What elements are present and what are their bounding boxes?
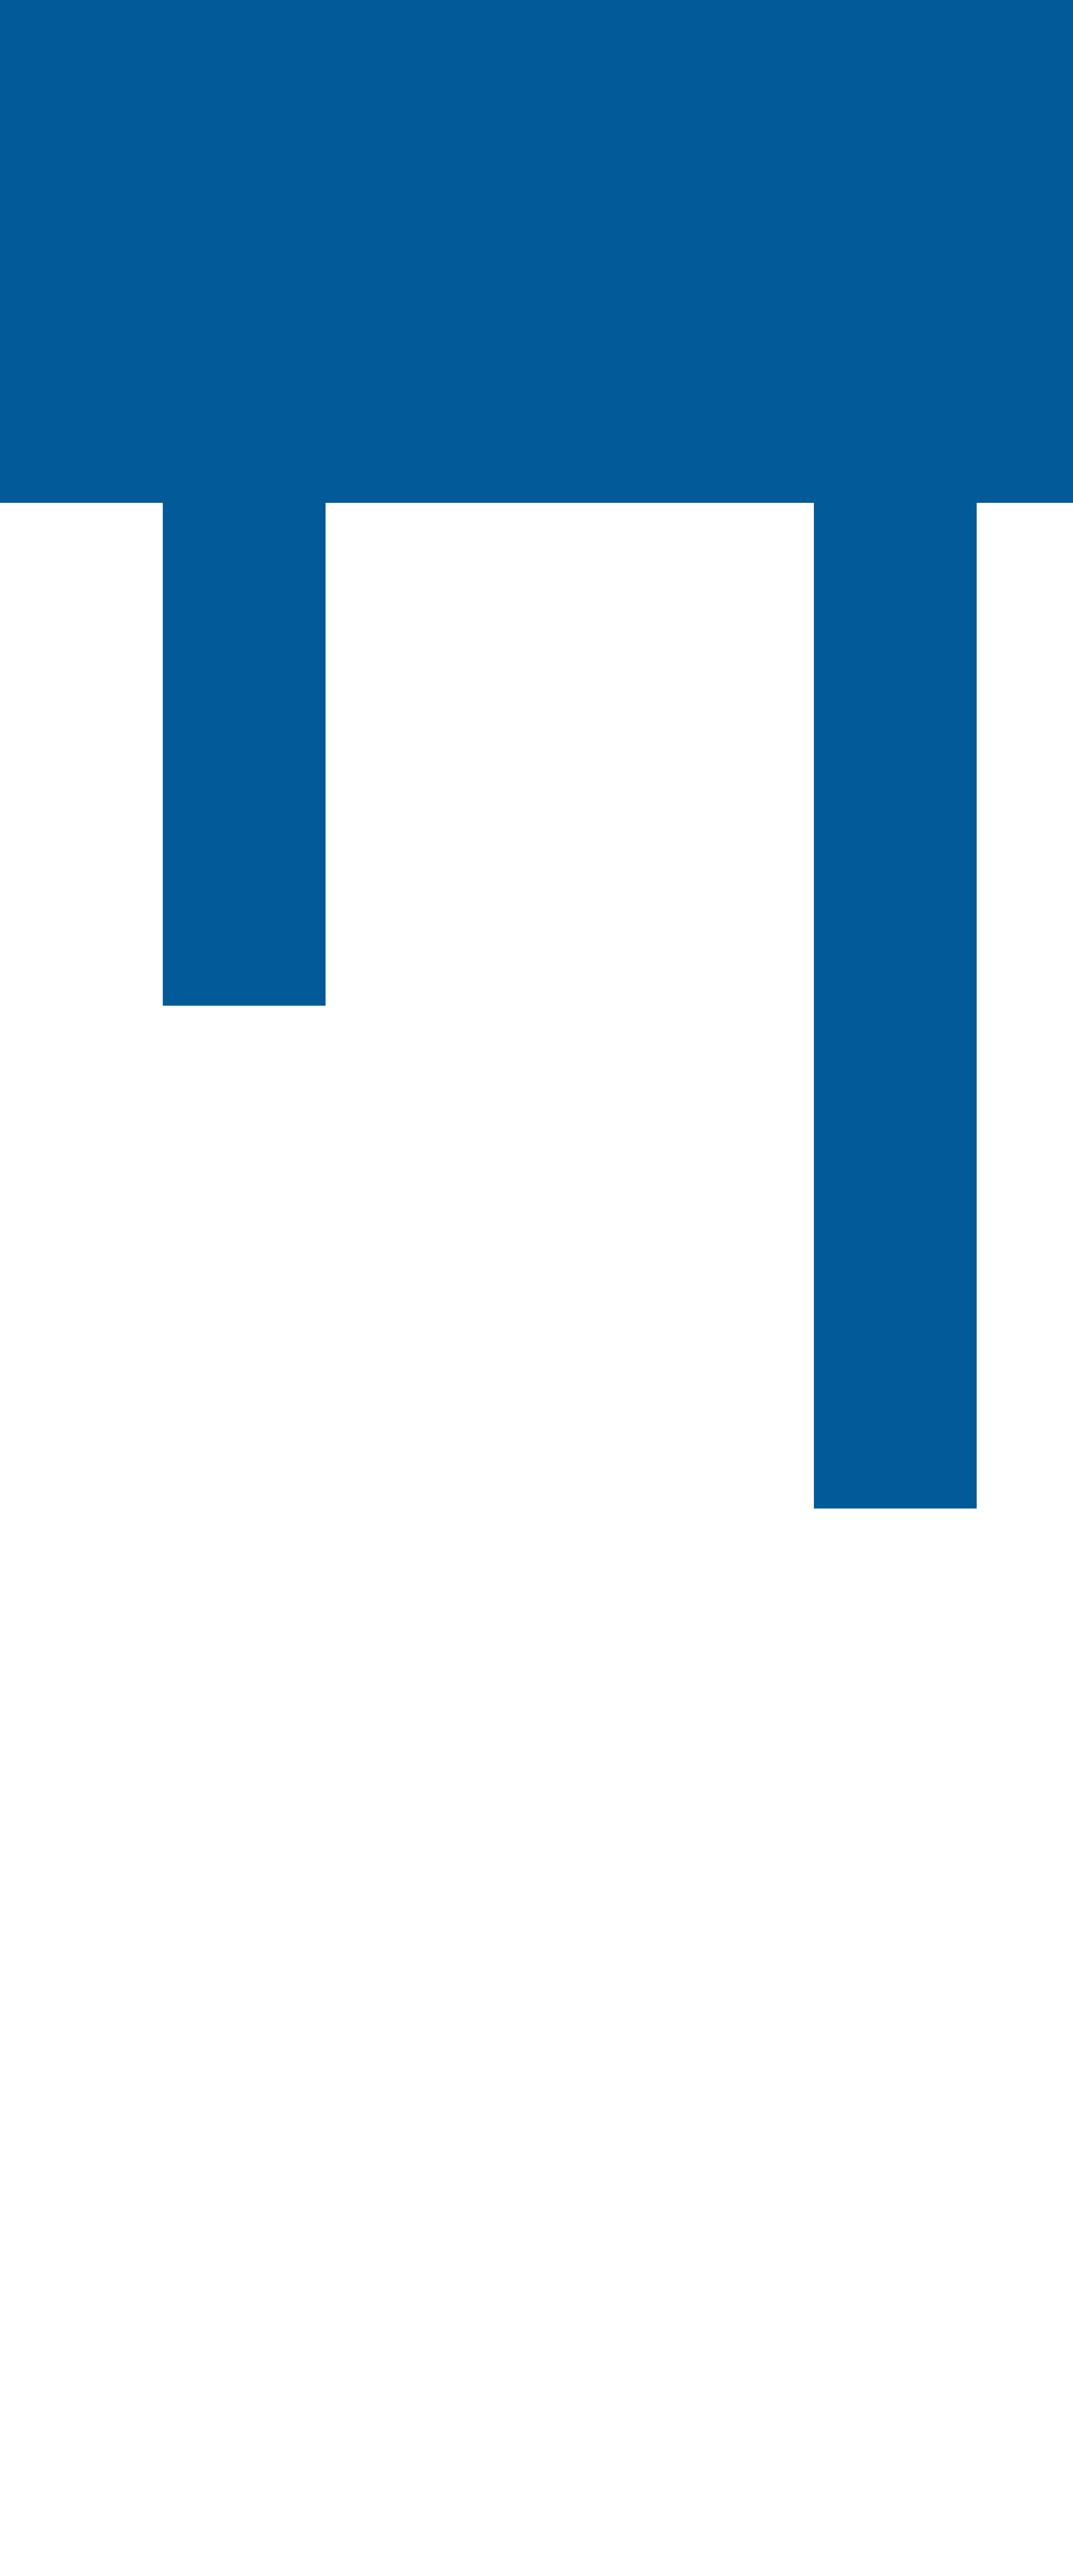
header band <box>0 0 1073 503</box>
right drip <box>814 500 977 1509</box>
left drip <box>163 500 326 1006</box>
